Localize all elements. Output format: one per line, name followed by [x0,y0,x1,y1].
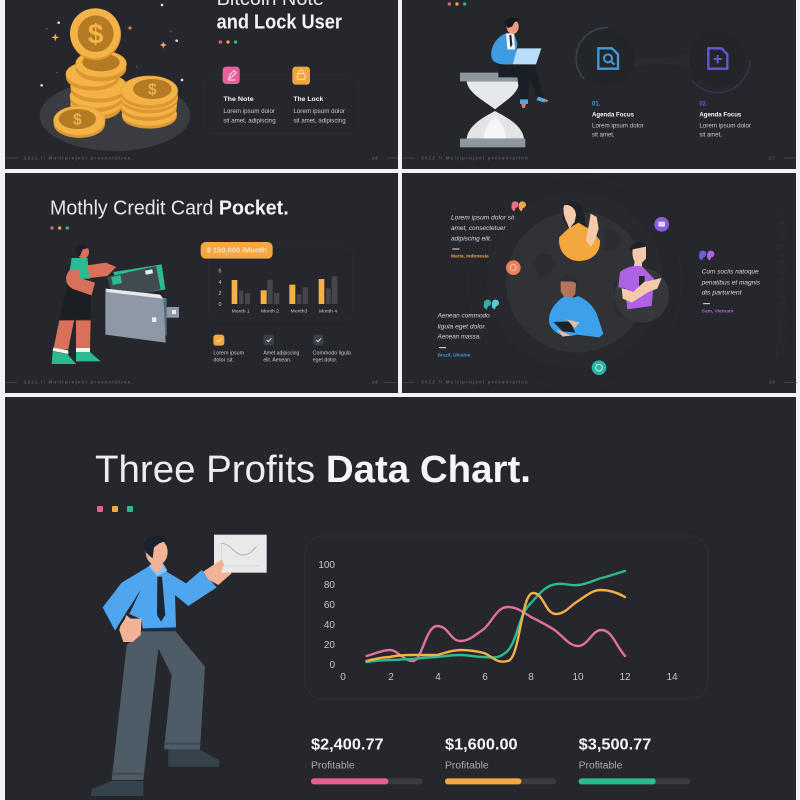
chart card [201,242,353,320]
person: woman in orange [559,201,600,261]
icon ring: search document [575,27,620,80]
checklist: Lorem ipsum [213,350,245,356]
line chart: 12 [619,672,631,683]
quote: maria: adipiscing elit. [451,236,492,242]
illustration: gold coin stacks: $ [88,18,104,49]
heading: Mothly Credit Card Pocket. [50,197,289,219]
icon: note [223,67,240,84]
bar chart: 2 [219,291,222,297]
icon: teal badge [592,360,606,375]
line chart: 0 [329,660,335,671]
quote: sam [699,251,760,313]
footer: 2022 // Multiproject presentation [24,380,131,385]
text: agenda one: Lorem ipsum dolor [592,123,644,129]
text: the note: The Note [223,96,254,103]
heading [217,0,342,28]
chart card [305,536,708,699]
bar chart: 0 [219,302,222,308]
bar chart: 6 [219,269,222,275]
illustration: person on hourglass [460,18,549,147]
card: note and lock [222,66,346,124]
panel: bitcoin note slide [5,0,400,169]
panel: agenda slide [402,0,797,169]
footer: 2022 // Multiproject presentation [421,155,529,160]
line chart [318,560,678,683]
checklist: Commodo ligula [313,350,351,356]
price tag [201,242,273,259]
quote: sam: Cum sociis natoque [702,270,759,276]
stat: green: $3,500.77 [579,736,651,753]
vertical label: Testimonial [774,212,790,362]
line chart: 60 [324,600,335,611]
text: agenda two: 02. [699,102,708,108]
illustration: gold coin stacks: $ [148,82,157,99]
text: agenda two: sit amet, [699,133,722,139]
illustration: gold coin stacks: $ [73,112,82,129]
icon: orange badge [506,260,521,275]
globe backdrop [468,175,682,389]
stat: orange [445,736,556,784]
line chart: 100 [318,560,335,571]
quote: brazil: Aenean commodo [437,314,490,320]
text: the note [223,96,276,124]
quote: sam: penatibus et magnis [701,280,760,286]
text: agenda two: Agenda Focus [699,112,742,119]
quote: maria: Lorem ipsum dolor sit [451,215,515,221]
footer: 2022 // Multiproject presentation [421,380,529,385]
icon ring: add document [691,47,750,93]
stat: pink: Profitable [311,761,355,772]
stat: orange: $1,600.00 [445,736,518,753]
checklist: elit. Aenean. [263,358,291,364]
connector between rings [632,53,690,68]
accent dots [50,226,69,230]
text: agenda two: Lorem ipsum dolor [699,123,751,129]
line chart: 0 [340,672,346,683]
line chart: 10 [572,672,584,683]
text: agenda one: Agenda Focus [592,112,634,119]
checklist: dolor sit. [213,358,234,364]
quote: maria [451,201,526,258]
quote: sam: dis parturient [702,291,742,297]
stat: green [579,736,690,784]
line chart: 2 [388,672,394,683]
line chart: 8 [528,672,534,683]
illustration: businessman holding chart [91,535,267,796]
line chart: 6 [482,672,488,683]
text: agenda one [592,102,644,139]
text: agenda one: sit amet, [592,133,615,139]
line chart: 20 [324,640,335,651]
panel: credit card slide [5,173,398,393]
stats row [311,736,690,784]
bar chart: Month 1 [232,308,250,314]
footer [5,156,398,160]
text: the note: Lorem ipsum dolor [223,109,275,115]
footer [5,380,397,385]
text: the lock: The Lock [293,96,324,103]
quote: maria: Maria, Indonesia [451,253,489,258]
footer: 2022 // Multiproject presentation [24,155,131,160]
accent squares [97,506,133,512]
stat: pink: $2,400.77 [311,736,384,753]
checklist: eget dolor. [313,358,337,364]
text: the lock: sit amet, adipiscing [293,118,346,124]
icon: sparkles [40,4,183,87]
quote: maria: amet, consectetuer [451,226,507,232]
price tag: $ 150,000 /Month [207,246,267,255]
bar chart: Month3 [291,308,308,314]
text: the lock: Lorem ipsum dolor [293,109,345,115]
footer [402,156,796,160]
bar chart [219,269,337,314]
person: man in purple [618,243,662,309]
text: agenda one: 01. [592,102,601,108]
illustration: gold coin stacks [40,8,190,151]
footer: 28 [372,380,378,385]
quote: brazil: Aenean massa. [437,335,481,341]
quote: brazil: ligula eget dolor. [438,324,486,330]
accent dots [219,40,237,44]
stat: orange: Profitable [445,761,489,772]
line chart: 4 [435,672,441,683]
footer: 28 [372,155,378,160]
text: agenda two [699,102,751,139]
footer: 29 [769,380,776,385]
checklist: Amet adipiscing [263,350,299,356]
quote: brazil [437,300,499,358]
accent dots [448,2,466,6]
text: the lock [293,96,346,124]
illustration: woman with wallet [52,245,179,364]
bar chart: Month 4 [319,308,337,314]
bar chart: Month 2 [261,308,279,314]
footer: 27 [769,155,776,160]
heading: and Lock User [217,11,342,33]
icon: lock [292,67,310,85]
quote: brazil: Brazil, Ukraine [438,353,471,358]
person: man in blue [549,275,603,337]
line chart: 40 [324,620,335,631]
line chart: 14 [666,672,678,683]
line chart: 80 [324,580,335,591]
footer [403,380,797,385]
heading: Three Profits Data Chart. [95,449,531,491]
stat: pink [311,736,423,784]
panel: three profits slide [5,397,796,800]
panel: testimonials slide [402,173,797,393]
stat: green: Profitable [579,761,623,772]
icon: purple badge [654,217,669,232]
checklist [213,335,351,364]
bar chart: 4 [219,280,222,286]
quote: sam: Sam, Vietnam [702,308,733,313]
text: the note: sit amet, adipiscing [223,118,276,124]
